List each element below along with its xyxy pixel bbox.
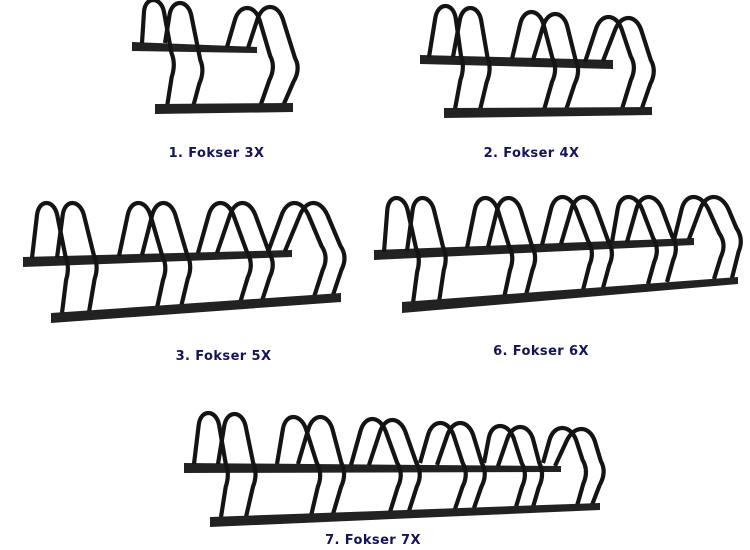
label: 7. Fokser 7X <box>325 533 421 548</box>
rear bar <box>23 250 292 267</box>
front bar <box>444 107 652 118</box>
label: 6. Fokser 6X <box>493 344 589 359</box>
rear bar <box>420 55 613 69</box>
product: rack 6 Fokser 6X <box>374 197 741 359</box>
rear bar <box>132 42 257 53</box>
product: rack 2 Fokser 4X <box>420 6 654 161</box>
rear bar <box>374 238 694 260</box>
front bar <box>155 103 293 114</box>
label: 2. Fokser 4X <box>484 146 579 161</box>
product: rack 1 Fokser 3X <box>132 0 298 161</box>
hoops <box>194 413 604 517</box>
hoops <box>32 203 344 313</box>
front bar <box>51 293 341 323</box>
label: 1. Fokser 3X <box>169 146 264 161</box>
hoops <box>384 197 741 303</box>
product: rack 3 Fokser 5X <box>23 203 344 364</box>
front bar <box>402 277 738 313</box>
hoops <box>142 0 298 107</box>
front bar <box>210 503 600 527</box>
rear bar <box>184 463 561 473</box>
hoops <box>429 6 654 110</box>
label: 3. Fokser 5X <box>176 349 271 364</box>
product: rack 7 Fokser 7X <box>184 413 604 548</box>
